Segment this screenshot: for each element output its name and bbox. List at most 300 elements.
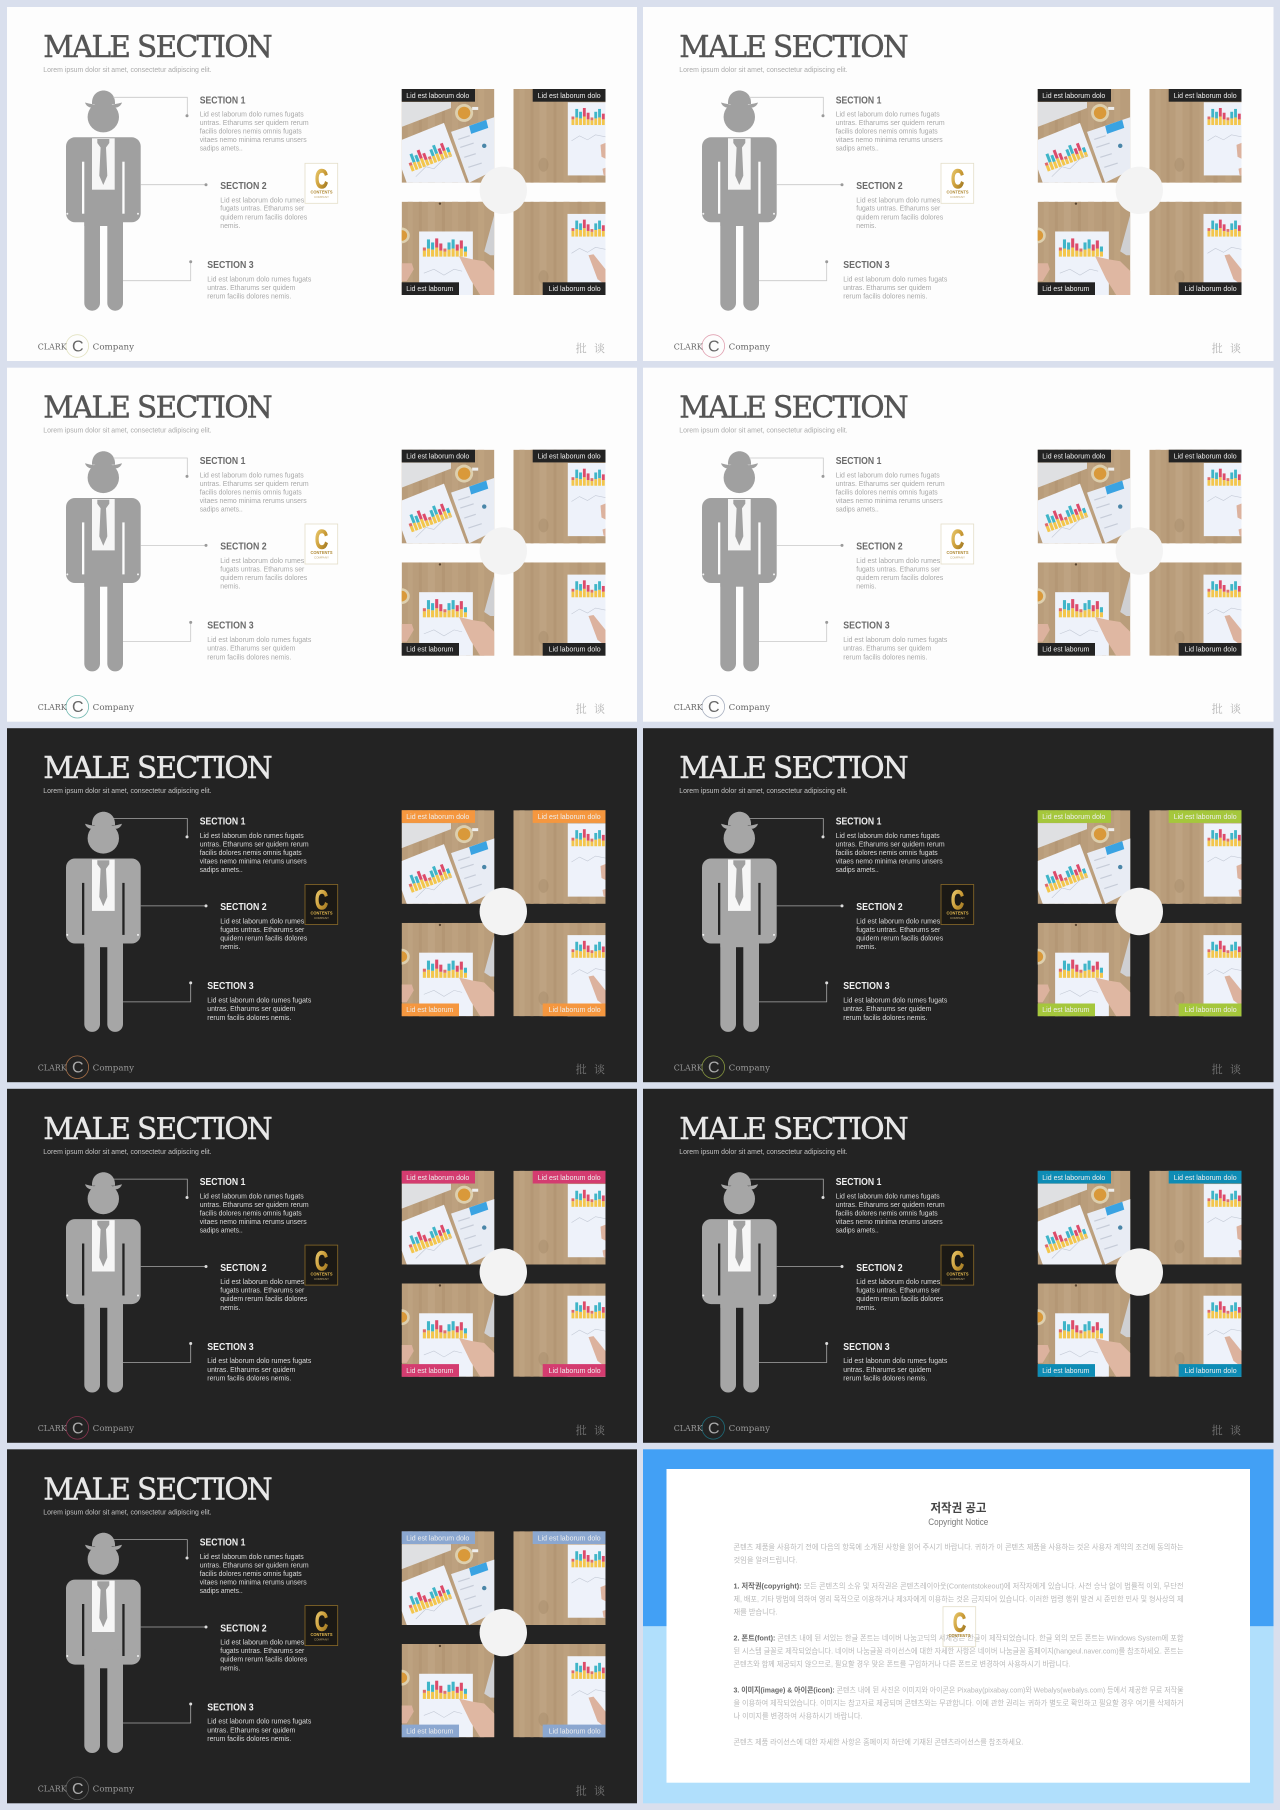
section 2: SECTION 2	[220, 1622, 267, 1634]
section 2: SECTION 2	[220, 901, 267, 913]
section 3: SECTION 3	[207, 1701, 254, 1713]
section 1	[200, 1176, 309, 1234]
section 2	[220, 1262, 308, 1312]
section 3: rerum facilis dolores nemis.	[843, 1376, 927, 1383]
photo grid: Lid laborum dolo	[549, 1728, 601, 1735]
section 3: Lid est laborum dolo rumes fugats	[843, 637, 948, 644]
section 3: SECTION 3	[843, 620, 890, 632]
icon: gold logo: COMPANY	[950, 556, 965, 560]
notice body: 콘텐츠 제품을 사용하기 전에 다음의 항목에 소개된 사항을 읽어 주시기 바랍니다. 귀하가 이 콘텐츠 제품을 사용하는 것은 사용자 계약의 조건에 동의하는	[734, 1542, 1184, 1552]
section 3: untras. Etharums ser quidem	[843, 646, 931, 653]
section 2: nemis.	[220, 944, 240, 951]
icon: gold logo: COMPANY	[950, 195, 965, 199]
icon: gold logo: C	[315, 885, 328, 915]
connectors	[113, 818, 208, 1002]
section 2	[220, 1622, 308, 1672]
section 3: untras. Etharums ser quidem	[207, 1727, 295, 1734]
section 2	[856, 541, 944, 591]
photo grid: Lid est laborum dolo	[538, 93, 601, 100]
photo grid: Lid est laborum dolo	[406, 1535, 469, 1542]
section 2: SECTION 2	[856, 180, 903, 192]
icon: gold logo: COMPANY	[314, 1277, 329, 1281]
section 3: Lid est laborum dolo rumes fugats	[207, 1719, 312, 1726]
icon: gold logo: C	[315, 525, 328, 555]
section 1: vitaes nemo minima rerums unsers	[200, 498, 307, 505]
icon: gold logo: COMPANY	[314, 556, 329, 560]
section 1: facilis dolores nemis omnis fugats	[200, 489, 302, 496]
photo grid: Lid est laborum	[406, 286, 453, 293]
photo grid: Lid laborum dolo	[549, 1007, 601, 1014]
section 3	[843, 1341, 948, 1382]
panel: copyright notice	[643, 1449, 1274, 1803]
photo grid	[1030, 810, 1248, 1016]
section 1	[200, 455, 309, 513]
section 2: SECTION 2	[856, 541, 903, 553]
section 2: nemis.	[220, 1665, 240, 1672]
subtitle: Lorem ipsum dolor sit amet, consectetur adipiscing elit.	[43, 67, 212, 74]
notice body: 콘텐츠와 함께 제공되지 않으므로, 필요할 경우 맞은 폰트를 구입하거나 다른 폰트로 변경하여 사용하시기 바랍니다.	[734, 1658, 1070, 1668]
section 1: Lid est laborum dolo rumes fugats	[836, 472, 940, 479]
connectors	[749, 458, 844, 641]
footer logo: Company	[93, 703, 135, 712]
footer logo	[674, 695, 771, 718]
connectors	[749, 1179, 844, 1362]
section 1: facilis dolores nemis omnis fugats	[200, 1211, 302, 1218]
icon: man figure	[66, 451, 141, 671]
section 3: rerum facilis dolores nemis.	[207, 1736, 291, 1743]
section 3	[843, 259, 948, 301]
notice body: 나 이미지를 변경하여 사용하시기 바랍니다.	[734, 1710, 862, 1720]
footer logo: CLARK	[674, 1424, 704, 1433]
corner glyphs: 批 谈	[1212, 1062, 1241, 1076]
section 2: quidem rerum facilis dolores	[220, 936, 308, 943]
photo grid: Lid est laborum	[406, 1728, 453, 1735]
icon: gold logo	[305, 884, 338, 924]
subtitle: Lorem ipsum dolor sit amet, consectetur adipiscing elit.	[43, 1509, 212, 1516]
footer logo: CLARK	[38, 342, 68, 351]
section 2: quidem rerum facilis dolores	[220, 575, 308, 582]
photo grid: Lid laborum dolo	[1185, 286, 1237, 293]
section 2: nemis.	[856, 584, 876, 591]
section 1: sadips amets..	[836, 867, 879, 874]
notice body: 콘텐츠 제품 라이선스에 대한 자세한 사항은 홈페이지 하단에 기재된 콘텐츠라이선스를 참조하세요.	[734, 1736, 1024, 1746]
footer logo: CLARK	[674, 1064, 704, 1072]
footer logo: C	[708, 699, 720, 716]
section 1: SECTION 1	[200, 1537, 246, 1549]
section 1	[836, 455, 945, 513]
section 2: Lid est laborum dolo rumes	[220, 1640, 305, 1647]
section 3	[843, 620, 948, 661]
section 1: untras. Etharums ser quidem rerum	[836, 481, 945, 488]
section 2: fugats untras. Etharums ser	[220, 927, 305, 934]
footer logo: Company	[93, 1785, 135, 1794]
section 2: fugats untras. Etharums ser	[856, 566, 941, 573]
panel: slide 2 light	[643, 7, 1274, 361]
photo grid: Lid est laborum	[1042, 1368, 1089, 1375]
section 2: SECTION 2	[856, 1262, 903, 1274]
photo grid	[394, 450, 612, 656]
section 1	[200, 816, 309, 874]
icon: gold logo: C	[951, 525, 964, 555]
icon: gold logo: CONTENTS	[310, 1271, 333, 1276]
section 2: Lid est laborum dolo rumes	[856, 558, 941, 565]
section 3: Lid est laborum dolo rumes fugats	[843, 1358, 948, 1365]
section 2: nemis.	[856, 1305, 876, 1312]
section 2	[856, 180, 944, 230]
notice subheading: Copyright Notice	[928, 1517, 988, 1527]
icon: gold logo: COMPANY	[314, 195, 329, 199]
footer logo: C	[72, 338, 84, 356]
section 2: nemis.	[220, 1305, 240, 1312]
icon: man figure	[66, 1533, 141, 1753]
section 1: facilis dolores nemis omnis fugats	[836, 489, 938, 496]
section 3: untras. Etharums ser quidem	[843, 1006, 931, 1013]
title: MALE SECTION	[679, 1112, 909, 1146]
icon: gold logo	[305, 1245, 338, 1285]
footer logo	[674, 335, 771, 357]
photo grid: Lid est laborum	[1042, 1007, 1089, 1014]
photo grid: Lid est laborum dolo	[1174, 814, 1237, 821]
section 1: Lid est laborum dolo rumes fugats	[200, 833, 304, 840]
notice body: 을 이용하여 제작되었습니다. 이미지는 참고자료 제공되며 콘텐츠와는 무관합니다. 이에 관한 권리는 귀하가 별도로 확인하고 필요할 경우 여기를 삭제하거	[734, 1698, 1184, 1708]
section 2: Lid est laborum dolo rumes	[220, 919, 305, 926]
icon: gold logo: CONTENTS	[946, 1271, 969, 1276]
icon: gold logo	[941, 1245, 974, 1285]
section 2: Lid est laborum dolo rumes	[856, 919, 941, 926]
icon: gold logo: C	[315, 164, 328, 194]
icon: gold logo	[941, 884, 974, 924]
section 1: sadips amets..	[836, 506, 879, 513]
section 1	[200, 94, 309, 153]
panel: slide 7 dark pink	[7, 1089, 637, 1443]
subtitle: Lorem ipsum dolor sit amet, consectetur adipiscing elit.	[679, 788, 848, 795]
panel: slide 3 light	[7, 368, 637, 722]
notice body: 된 시스템 글꼴로 제작되었습니다. 네이버 나눔글꼴 라이선스에 대한 자세한 사항은 네이버 나눔글꼴 홈페이지(hangeul.naver.com)를 참조하세요. 폰트는	[734, 1646, 1184, 1656]
title: MALE SECTION	[43, 391, 273, 425]
section 3: SECTION 3	[207, 620, 254, 632]
connectors	[113, 97, 208, 281]
section 1: facilis dolores nemis omnis fugats	[200, 1571, 302, 1578]
photo grid: Lid est laborum dolo	[1174, 93, 1237, 100]
section 2: Lid est laborum dolo rumes	[856, 1279, 941, 1286]
footer logo	[674, 1416, 771, 1439]
section 2: quidem rerum facilis dolores	[220, 1296, 308, 1303]
notice heading: 저작권 공고	[930, 1500, 986, 1515]
section 3: Lid est laborum dolo rumes fugats	[843, 998, 948, 1004]
title: MALE SECTION	[43, 751, 273, 785]
footer logo: CLARK	[38, 703, 68, 712]
subtitle: Lorem ipsum dolor sit amet, consectetur adipiscing elit.	[43, 428, 212, 435]
footer logo: CLARK	[38, 1785, 68, 1794]
icon: gold logo: CONTENTS	[310, 190, 333, 194]
section 1	[836, 1176, 945, 1234]
section 2: Lid est laborum dolo rumes	[220, 197, 305, 204]
icon: gold logo: CONTENTS	[946, 550, 969, 555]
section 2: Lid est laborum dolo rumes	[856, 197, 941, 204]
icon: gold logo: C	[315, 1246, 328, 1276]
icon: gold logo overlay: CONTENTS	[948, 1633, 971, 1638]
photo grid	[1030, 1171, 1248, 1377]
section 1: SECTION 1	[200, 1176, 246, 1188]
corner glyphs: 批 谈	[576, 1062, 605, 1076]
photo grid	[1030, 450, 1248, 656]
section 3: SECTION 3	[843, 259, 890, 271]
section 3: rerum facilis dolores nemis.	[207, 294, 291, 301]
section 2: fugats untras. Etharums ser	[220, 1288, 305, 1295]
subtitle: Lorem ipsum dolor sit amet, consectetur adipiscing elit.	[679, 428, 848, 435]
title: MALE SECTION	[679, 30, 909, 64]
notice body	[734, 1542, 1184, 1746]
corner glyphs: 批 谈	[576, 1423, 605, 1437]
section 1: facilis dolores nemis omnis fugats	[836, 129, 938, 136]
title: MALE SECTION	[43, 1472, 273, 1506]
section 3	[843, 980, 948, 1022]
panel: slide 5 dark orange	[7, 728, 637, 1082]
section 1: Lid est laborum dolo rumes fugats	[200, 1194, 304, 1201]
photo grid: Lid laborum dolo	[1185, 1007, 1237, 1014]
icon: man figure	[66, 90, 141, 311]
section 2: fugats untras. Etharums ser	[856, 1288, 941, 1295]
section 2: quidem rerum facilis dolores	[856, 575, 944, 582]
corner glyphs: 批 谈	[576, 341, 605, 355]
icon: gold logo: C	[951, 1246, 964, 1276]
notice body: 2. 폰트(font): 콘텐츠 내에 된 서있는 한글 폰트는 네이버 나눔고딕의 서체명는 한글이 제작되었습니다. 한글 외의 모든 폰트는 Windows System에 포함	[734, 1632, 1184, 1642]
section 1	[836, 816, 945, 874]
photo grid: Lid est laborum dolo	[538, 1175, 601, 1182]
footer logo: CLARK	[674, 703, 704, 712]
icon: gold logo: COMPANY	[314, 1637, 329, 1641]
section 3: Lid est laborum dolo rumes fugats	[207, 637, 312, 644]
section 3	[207, 980, 312, 1022]
photo grid: Lid est laborum	[1042, 647, 1089, 654]
section 2: fugats untras. Etharums ser	[856, 927, 941, 934]
section 1: facilis dolores nemis omnis fugats	[200, 850, 302, 857]
photo grid: Lid est laborum	[406, 1007, 453, 1014]
section 3: rerum facilis dolores nemis.	[843, 1015, 927, 1022]
photo grid: Lid est laborum	[406, 647, 453, 654]
corner glyphs: 批 谈	[576, 1783, 605, 1797]
section 2: SECTION 2	[856, 901, 903, 913]
section 3: untras. Etharums ser quidem	[843, 1367, 931, 1374]
notice body: 재를 받습니다.	[734, 1606, 778, 1616]
icon: gold logo	[305, 163, 338, 203]
icon: gold logo: CONTENTS	[946, 911, 969, 916]
section 1	[836, 94, 945, 153]
panel: slide 8 dark blue	[643, 1089, 1274, 1443]
photo grid	[394, 1171, 612, 1377]
icon: man figure	[66, 812, 141, 1032]
section 2: nemis.	[220, 223, 240, 230]
section 1: SECTION 1	[836, 816, 882, 828]
icon: gold logo overlay	[943, 1607, 976, 1647]
footer logo	[38, 695, 135, 718]
footer logo: Company	[729, 342, 771, 351]
icon: gold logo: COMPANY	[950, 916, 965, 920]
icon: gold logo: CONTENTS	[310, 550, 333, 555]
photo grid: Lid est laborum	[1042, 286, 1089, 293]
section 2: SECTION 2	[220, 1262, 267, 1274]
footer logo: C	[72, 699, 84, 716]
panel: slide 4 light	[643, 368, 1274, 722]
section 3: rerum facilis dolores nemis.	[843, 654, 927, 661]
subtitle: Lorem ipsum dolor sit amet, consectetur adipiscing elit.	[43, 1149, 212, 1156]
section 3: untras. Etharums ser quidem	[207, 646, 295, 653]
section 2	[856, 901, 944, 951]
section 1: untras. Etharums ser quidem rerum	[200, 120, 309, 127]
footer logo: Company	[93, 342, 135, 351]
section 2: quidem rerum facilis dolores	[856, 214, 944, 221]
section 2	[220, 541, 308, 591]
section 3: rerum facilis dolores nemis.	[843, 294, 927, 301]
notice body: 것임을 알려드립니다.	[734, 1554, 798, 1564]
footer logo	[38, 335, 135, 357]
footer logo: CLARK	[38, 1424, 68, 1433]
section 2	[220, 901, 308, 951]
notice body: 1. 저작권(copyright): 모든 콘텐츠의 소유 및 저작권은 콘텐츠레이아웃(Contentstokeout)에 저작자에게 있습니다. 사전 승낙 없이 법률적 이외, 무단전	[734, 1580, 1184, 1590]
icon: gold logo: COMPANY	[314, 916, 329, 920]
photo grid: Lid est laborum dolo	[1174, 1175, 1237, 1182]
icon: gold logo overlay: C	[953, 1607, 966, 1637]
section 2: fugats untras. Etharums ser	[220, 566, 305, 573]
section 1: Lid est laborum dolo rumes fugats	[836, 1194, 940, 1201]
photo grid: Lid est laborum dolo	[406, 93, 469, 100]
section 1	[200, 1537, 309, 1595]
photo grid	[394, 810, 612, 1016]
photo grid: Lid est laborum dolo	[406, 1175, 469, 1182]
photo grid: Lid est laborum	[406, 1368, 453, 1375]
corner glyphs: 批 谈	[1212, 1423, 1241, 1437]
section 3	[207, 1341, 312, 1382]
icon: man figure	[702, 90, 777, 311]
footer logo: CLARK	[674, 342, 704, 351]
photo grid: Lid est laborum dolo	[1042, 93, 1105, 100]
section 1: facilis dolores nemis omnis fugats	[836, 1211, 938, 1218]
photo grid: Lid est laborum dolo	[1042, 454, 1105, 461]
section 2: quidem rerum facilis dolores	[220, 1657, 308, 1664]
connectors	[113, 1179, 208, 1362]
section 3: untras. Etharums ser quidem	[207, 1006, 295, 1013]
photo grid: Lid laborum dolo	[1185, 647, 1237, 654]
section 1: sadips amets..	[200, 1588, 243, 1595]
section 1: untras. Etharums ser quidem rerum	[836, 120, 945, 127]
section 1: SECTION 1	[200, 816, 246, 828]
section 3	[207, 259, 312, 301]
section 2: fugats untras. Etharums ser	[856, 206, 941, 213]
photo grid: Lid est laborum dolo	[538, 454, 601, 461]
section 1: Lid est laborum dolo rumes fugats	[200, 1554, 304, 1561]
section 1: vitaes nemo minima rerums unsers	[836, 498, 943, 505]
footer logo: CLARK	[38, 1064, 68, 1072]
section 1: sadips amets..	[836, 146, 879, 153]
photo grid: Lid laborum dolo	[549, 647, 601, 654]
photo grid	[394, 89, 612, 295]
section 3: untras. Etharums ser quidem	[207, 285, 295, 292]
section 2: nemis.	[856, 944, 876, 951]
photo grid: Lid est laborum dolo	[406, 814, 469, 821]
section 2: SECTION 2	[220, 541, 267, 553]
photo grid: Lid est laborum dolo	[406, 454, 469, 461]
section 3: SECTION 3	[843, 1341, 890, 1353]
connectors	[749, 818, 844, 1002]
footer logo	[38, 1416, 135, 1439]
section 3: untras. Etharums ser quidem	[843, 285, 931, 292]
footer logo: C	[708, 1420, 720, 1437]
footer logo: Company	[729, 703, 771, 712]
section 3: SECTION 3	[207, 1341, 254, 1353]
section 1: vitaes nemo minima rerums unsers	[200, 858, 307, 865]
subtitle: Lorem ipsum dolor sit amet, consectetur adipiscing elit.	[679, 1149, 848, 1156]
icon: gold logo	[941, 524, 974, 564]
footer logo: Company	[729, 1064, 771, 1072]
photo grid: Lid est laborum dolo	[1042, 1175, 1105, 1182]
icon: gold logo	[305, 1606, 338, 1646]
section 1: untras. Etharums ser quidem rerum	[836, 1202, 945, 1209]
section 1: Lid est laborum dolo rumes fugats	[836, 112, 940, 119]
footer logo: Company	[729, 1424, 771, 1433]
section 3	[207, 1701, 312, 1743]
section 3: Lid est laborum dolo rumes fugats	[207, 998, 312, 1004]
section 3: Lid est laborum dolo rumes fugats	[207, 1358, 312, 1365]
icon: gold logo: CONTENTS	[310, 911, 333, 916]
section 1: SECTION 1	[836, 1176, 882, 1188]
corner glyphs: 批 谈	[1212, 341, 1241, 355]
section 1: Lid est laborum dolo rumes fugats	[200, 472, 304, 479]
notice body: 제, 배포, 기타 방법에 의하여 영리 목적으로 이용하거나 제3자에게 이용하는 것은 금지되어 있습니다. 이러한 법령 행위 발견 시 준민한 민사 및 형사상의 제	[734, 1593, 1184, 1603]
photo grid	[1030, 89, 1248, 295]
section 2: quidem rerum facilis dolores	[856, 1296, 944, 1303]
section 1: vitaes nemo minima rerums unsers	[836, 137, 943, 144]
section 1: Lid est laborum dolo rumes fugats	[836, 833, 940, 840]
photo grid: Lid est laborum dolo	[1042, 814, 1105, 821]
section 2: quidem rerum facilis dolores	[856, 936, 944, 943]
section 3: Lid est laborum dolo rumes fugats	[843, 276, 948, 283]
footer logo: C	[708, 1060, 720, 1077]
footer logo: C	[708, 338, 720, 356]
section 3: SECTION 3	[207, 259, 254, 271]
section 2: quidem rerum facilis dolores	[220, 214, 308, 221]
footer logo: C	[72, 1781, 84, 1798]
icon: gold logo: C	[951, 164, 964, 194]
section 1: untras. Etharums ser quidem rerum	[836, 841, 945, 848]
title: MALE SECTION	[43, 30, 273, 64]
photo grid: Lid est laborum dolo	[1174, 454, 1237, 461]
section 3	[207, 620, 312, 661]
icon: gold logo: C	[951, 885, 964, 915]
section 2: nemis.	[856, 223, 876, 230]
subtitle: Lorem ipsum dolor sit amet, consectetur adipiscing elit.	[43, 788, 212, 795]
section 1: vitaes nemo minima rerums unsers	[200, 1219, 307, 1226]
photo grid: Lid laborum dolo	[549, 1368, 601, 1375]
icon: man figure	[66, 1172, 141, 1392]
section 3: rerum facilis dolores nemis.	[207, 1015, 291, 1022]
section 1: vitaes nemo minima rerums unsers	[836, 1219, 943, 1226]
section 3: untras. Etharums ser quidem	[207, 1367, 295, 1374]
section 1: facilis dolores nemis omnis fugats	[836, 850, 938, 857]
icon: gold logo: CONTENTS	[946, 190, 969, 194]
photo grid: Lid laborum dolo	[1185, 1368, 1237, 1375]
icon: gold logo: COMPANY	[950, 1277, 965, 1281]
title: MALE SECTION	[679, 391, 909, 425]
connectors	[113, 1540, 208, 1723]
section 1: untras. Etharums ser quidem rerum	[200, 841, 309, 848]
section 2: Lid est laborum dolo rumes	[220, 558, 305, 565]
panel: slide 6 dark green	[643, 728, 1274, 1082]
section 1: SECTION 1	[836, 94, 882, 106]
section 1: sadips amets..	[836, 1228, 879, 1235]
section 2: fugats untras. Etharums ser	[220, 206, 305, 213]
section 1: Lid est laborum dolo rumes fugats	[200, 112, 304, 119]
section 3: Lid est laborum dolo rumes fugats	[207, 276, 312, 283]
